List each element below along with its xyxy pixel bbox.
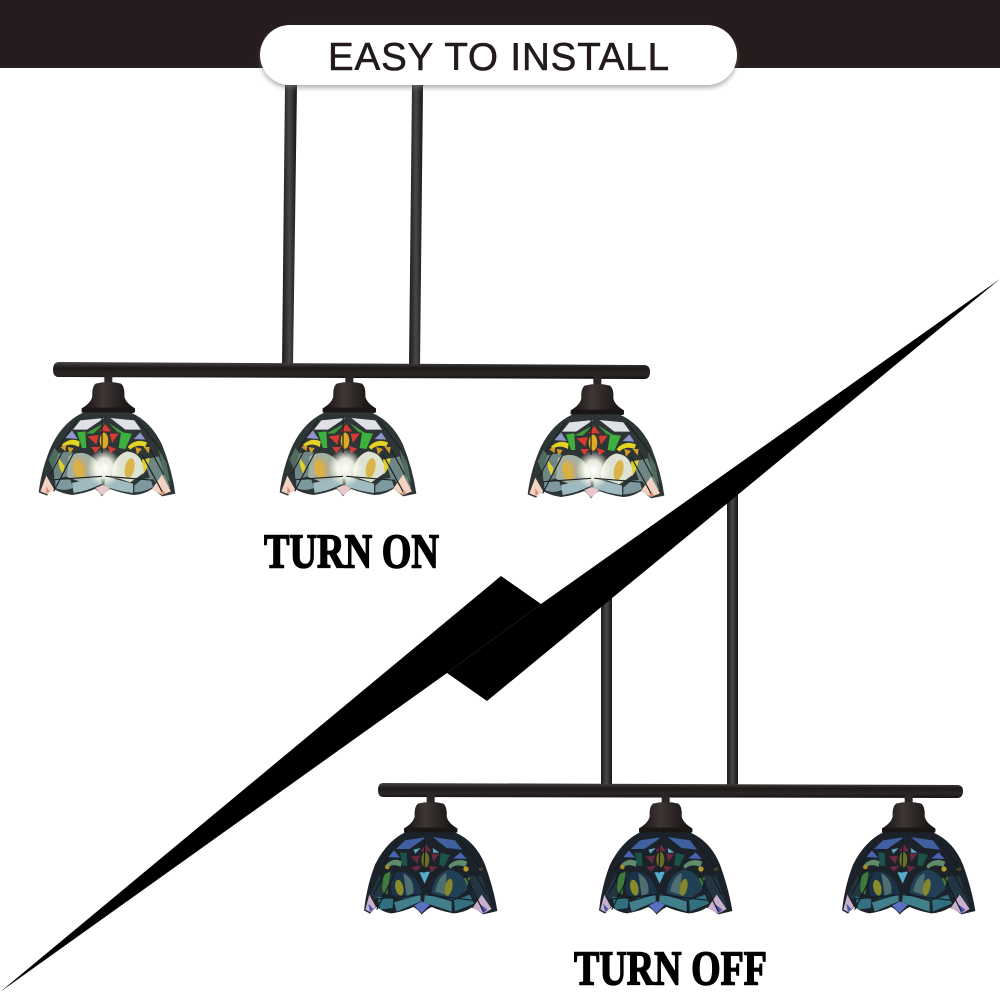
- lit shade 2: [280, 374, 416, 496]
- lit shade 3: [528, 376, 664, 498]
- unlit fixture: turned off: [364, 783, 975, 915]
- lamp on: hanging rods: [282, 85, 423, 366]
- top header band: [0, 0, 1000, 68]
- label: turn off: TURN OFF: [574, 940, 767, 996]
- unlit shade 3: [842, 794, 975, 915]
- title text: EASY TO INSTALL: [328, 36, 669, 79]
- lamp off: hanging rods: [601, 490, 738, 785]
- unlit shade 1: [364, 794, 497, 915]
- lit fixture: turned on: [39, 362, 664, 498]
- lit shade 1: [39, 374, 175, 496]
- lightning bolt divider: [0, 279, 1000, 992]
- title pill: [260, 25, 737, 88]
- label: turn on: TURN ON: [264, 524, 439, 578]
- horizontal bar: [53, 362, 650, 379]
- horizontal bar: [378, 783, 963, 798]
- unlit shade 2: [599, 794, 732, 915]
